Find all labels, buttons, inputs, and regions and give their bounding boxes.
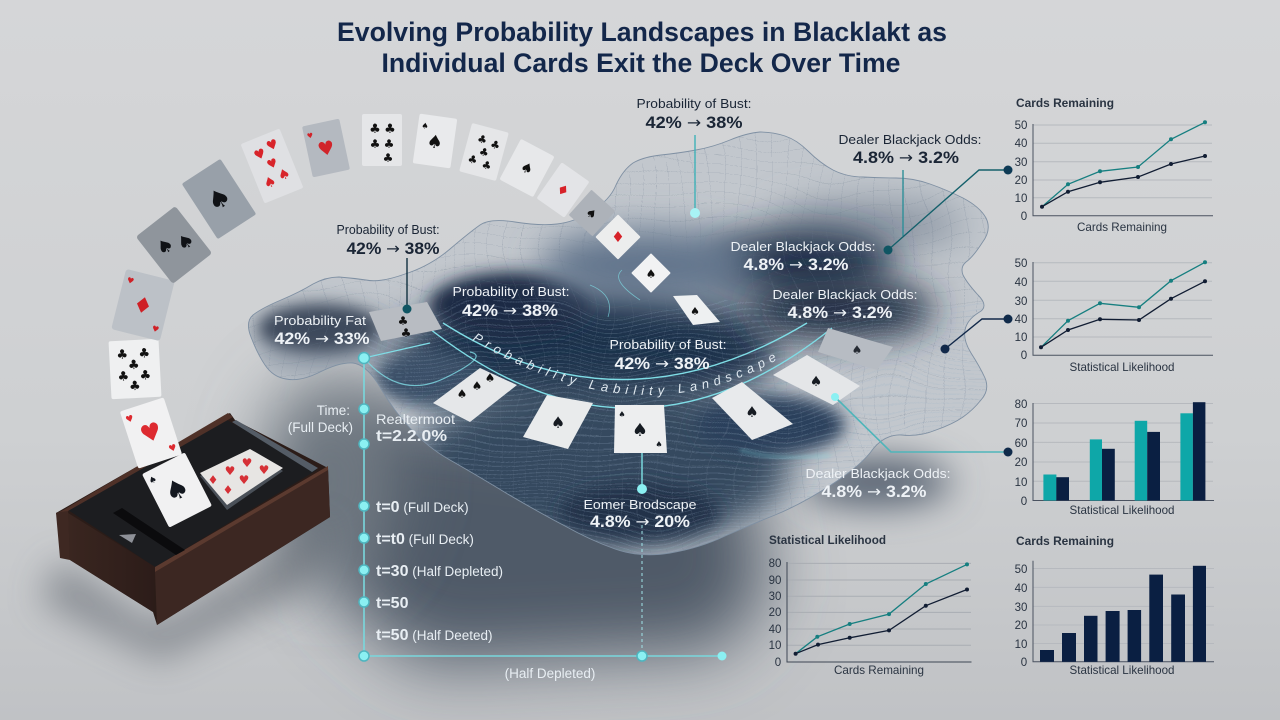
card: spade tilted: ♠: [551, 413, 565, 432]
chart: statistical likelihood line bottom: 10: [769, 640, 781, 652]
chart: cards remaining line 1: 40: [1015, 138, 1027, 150]
card: gray heart: [302, 119, 350, 177]
callout: eomer brodscape: 4.8% → 20%: [590, 512, 690, 531]
callout: probability fat: 42% → 33%: [274, 329, 370, 348]
arc text: Probability Lability Landscape: [472, 333, 776, 398]
card: spade front: ♠: [655, 440, 663, 449]
timeline labels: t=50 (Half Deeted): [376, 627, 493, 644]
card: spade far right: [773, 355, 860, 405]
chart: cards remaining line 1: 30: [1015, 157, 1027, 169]
card: spade far right: ♠: [810, 374, 822, 390]
card: deck of red cards: ♥: [225, 464, 235, 478]
surface cards: [369, 302, 893, 453]
card: spade in box: [142, 452, 212, 528]
callout: eomer brodscape: Eomer Brodscape: [584, 497, 696, 512]
card: ace of clubs: ♣: [139, 368, 152, 384]
card: ace of clubs: ♣: [128, 358, 140, 373]
chart: cards remaining line 1: 10: [1015, 193, 1027, 205]
callout connectors: [402, 135, 1012, 494]
card: seven of clubs tilted: [459, 123, 509, 181]
card: gray clubs: ♠: [172, 228, 199, 256]
card: small spade: ♠: [646, 267, 656, 281]
card: seven of clubs: ♣: [383, 151, 393, 165]
chart: cards remaining line 1: Cards Remaining: [1016, 96, 1114, 110]
callout: dealer mid: Dealer Blackjack Odds:: [772, 287, 918, 302]
chart: cards remaining line 1: 0: [1021, 211, 1027, 223]
chart: grouped bars: 80: [1015, 399, 1027, 411]
card: spades left: ♠: [485, 371, 495, 385]
timeline labels: t=0 (Full Deck): [376, 499, 469, 516]
card: spade: [499, 139, 555, 197]
callout: dealer lower: 4.8% → 3.2%: [822, 482, 926, 501]
callout: bust top: 42% → 38%: [646, 113, 742, 132]
card: gray spade: [182, 159, 256, 239]
card: flat clubs: ♣: [398, 314, 408, 328]
chart: statistical likelihood line 2: 40: [1015, 314, 1027, 326]
card: seven of clubs tilted: ♣: [466, 152, 479, 167]
timeline labels: [288, 403, 595, 681]
callout: bust left: Probability of Bust:: [336, 222, 440, 237]
card: seven of clubs tilted: ♣: [480, 158, 493, 173]
card: flat clubs: [369, 302, 442, 341]
callout: dealer lower: Dealer Blackjack Odds:: [806, 466, 950, 481]
card: seven of clubs tilted: ♣: [476, 132, 489, 147]
chart: statistical likelihood line bottom: Statistical Likelihood: [769, 533, 886, 547]
callout: probability fat: [274, 313, 370, 348]
card shower box: [40, 413, 330, 660]
card: flat spade: ♠: [690, 305, 700, 318]
card: ten of hearts: ♥: [264, 137, 281, 155]
timeline labels: Realtermoot: [376, 412, 455, 427]
card: deck of red cards: ♥: [239, 473, 249, 487]
callout: dealer mid: [772, 287, 918, 322]
card: spade: ♠: [517, 159, 536, 179]
chart: statistical likelihood line 2: 0: [1021, 350, 1027, 362]
title: Evolving Probability Landscapes in Blacklakt as: [337, 17, 947, 47]
timeline nodes: [358, 352, 726, 661]
card: falling ace of hearts: [120, 397, 182, 469]
card: spade front: ♠: [618, 410, 626, 419]
card: falling ace of hearts: ♥: [168, 443, 178, 455]
card: ten of hearts: ♠: [261, 173, 279, 193]
callout: bust left: 42% → 38%: [346, 239, 440, 258]
chart: cards remaining bars: 0: [1021, 657, 1027, 669]
chart: grouped bars: 0: [1021, 496, 1027, 508]
callout: bust centre: Probability of Bust:: [452, 284, 570, 299]
card: flat clubs: ♣: [401, 326, 411, 340]
card: ten of hearts: ♥: [252, 146, 268, 164]
chart: statistical likelihood line bottom: 80: [769, 558, 781, 570]
chart: cards remaining bars: [1015, 534, 1214, 677]
card: seven of clubs tilted: ♣: [477, 145, 490, 160]
card arc: [109, 114, 720, 399]
card: gray flat card: [818, 328, 893, 370]
timeline labels: t=30 (Half Depleted): [376, 563, 503, 580]
chart: cards remaining line 1: 50: [1015, 120, 1027, 132]
card: deck of red cards: ♥: [259, 463, 269, 477]
callout: bust lower: [610, 337, 726, 373]
chart: statistical likelihood line bottom: 20: [769, 607, 781, 619]
callout: probability fat: Probability Fat: [274, 313, 366, 328]
card: falling ace of hearts: ♥: [125, 414, 135, 426]
chart: cards remaining bars: 50: [1015, 564, 1027, 576]
timeline labels: t=2.2.0%: [376, 428, 447, 445]
card: seven of clubs: ♣: [384, 137, 394, 151]
card: seven of spades: ♠: [421, 121, 429, 131]
chart: grouped bars: Statistical Likelihood: [1070, 503, 1174, 517]
callout: dealer upper: [730, 239, 876, 274]
card: seven of clubs: [362, 114, 402, 166]
card: gray spade small: [569, 190, 615, 236]
card: red ace: ♦: [130, 292, 155, 321]
chart: cards remaining bars: Cards Remaining: [1016, 534, 1114, 548]
timeline labels: Time:: [317, 403, 350, 418]
callout: bust centre: 42% → 38%: [462, 301, 558, 320]
card: diamond: [536, 162, 590, 218]
chart: cards remaining bars: 30: [1015, 602, 1027, 614]
chart: statistical likelihood line 2: [1015, 258, 1213, 374]
card: deck of red cards: ♦: [223, 483, 233, 497]
card: seven of clubs: ♣: [370, 137, 380, 151]
chart: grouped bars: 60: [1015, 438, 1027, 450]
callout: dealer top: [838, 132, 982, 167]
callout: bust centre: [452, 284, 570, 320]
chart: statistical likelihood line bottom: 30: [769, 591, 781, 603]
callout: dealer mid: 4.8% → 3.2%: [788, 303, 892, 322]
chart: grouped bars: [1015, 399, 1214, 517]
card: gray flat card: ♠: [852, 343, 862, 357]
chart: statistical likelihood line 2: 40: [1015, 277, 1027, 289]
card: red ace: ♥: [151, 324, 160, 334]
card: seven of clubs: ♣: [384, 122, 396, 137]
card: seven of clubs tilted: ♣: [489, 138, 502, 153]
card: ten of hearts: [241, 128, 303, 204]
timeline: [358, 352, 726, 661]
card: falling ace of hearts: ♥: [136, 416, 166, 450]
chart: grouped bars: 70: [1015, 418, 1027, 430]
probability landscape surface: [248, 132, 989, 556]
timeline labels: t=50: [376, 595, 409, 612]
card: spades left: [433, 368, 517, 422]
chart: statistical likelihood line bottom: 40: [769, 624, 781, 636]
callout: dealer upper: 4.8% → 3.2%: [744, 255, 848, 274]
card: ace of clubs: ♣: [129, 379, 141, 394]
chart: cards remaining bars: Statistical Likelihood: [1070, 663, 1174, 677]
card: diamond: ♦: [553, 181, 572, 201]
chart: statistical likelihood line 2: 50: [1015, 258, 1027, 270]
chart: cards remaining line 1: 20: [1015, 175, 1027, 187]
callout: bust top: Probability of Bust:: [636, 96, 752, 111]
card: gray spade: ♠: [202, 181, 237, 219]
card: gray heart: ♥: [316, 136, 337, 162]
chart: statistical likelihood line 2: 30: [1015, 296, 1027, 308]
card: red diamond: [595, 214, 641, 260]
card: small spade: [631, 253, 671, 293]
card: gray clubs: [136, 206, 212, 284]
card: spades left: ♠: [472, 379, 482, 393]
callout: dealer lower: [806, 466, 950, 501]
chart: statistical likelihood line 2: Statistical Likelihood: [1070, 360, 1174, 374]
title: [337, 17, 947, 78]
callout: eomer brodscape: [584, 497, 696, 531]
card: seven of spades: ♠: [425, 131, 444, 154]
card: gray spade small: ♠: [583, 205, 600, 223]
card: ten of hearts: ♠: [275, 165, 293, 185]
card: ace of clubs: ♣: [116, 347, 128, 363]
callout: bust top: [636, 96, 752, 132]
chart: cards remaining line 1: Cards Remaining: [1077, 220, 1167, 234]
timeline labels: (Full Deck): [288, 420, 353, 435]
chart: statistical likelihood line bottom: Cards Remaining: [834, 663, 924, 677]
glowing wisps: [364, 270, 830, 458]
card: ace of clubs: [109, 339, 161, 399]
card: ace of clubs: ♣: [138, 346, 150, 362]
card: spade right: [712, 382, 793, 440]
chart: cards remaining line 1: [1015, 96, 1213, 234]
chart: cards remaining bars: 10: [1015, 639, 1027, 651]
chart: statistical likelihood line bottom: 0: [775, 657, 781, 669]
chart: cards remaining bars: 20: [1015, 620, 1027, 632]
chart: grouped bars: 10: [1015, 477, 1027, 489]
title: Individual Cards Exit the Deck Over Time: [382, 48, 900, 78]
card: red ace: [111, 269, 175, 341]
card: spade in box: ♠: [147, 474, 159, 487]
card: spade tilted: [523, 395, 593, 449]
card: spade right: ♠: [745, 403, 759, 421]
card: red ace: ♥: [126, 276, 135, 286]
callout: bust lower: Probability of Bust:: [610, 337, 726, 352]
callout: bust left: [336, 222, 440, 258]
card: deck of red cards: ♦: [208, 473, 218, 487]
card: seven of spades: [413, 114, 457, 168]
chart: statistical likelihood line bottom: [769, 533, 972, 677]
callout: bust lower: 42% → 38%: [614, 354, 710, 373]
chart: statistical likelihood line bottom: 90: [769, 575, 781, 587]
timeline labels: t=t0 (Full Deck): [376, 531, 474, 548]
timeline labels: (Half Depleted): [505, 666, 595, 681]
callout: dealer top: 4.8% → 3.2%: [853, 148, 959, 167]
callout: dealer upper: Dealer Blackjack Odds:: [730, 239, 876, 254]
card: gray clubs: ♠: [152, 233, 179, 261]
card: deck of red cards: [200, 449, 283, 510]
card: spade front: ♠: [632, 420, 648, 441]
card: spade front: [614, 405, 667, 453]
chart: statistical likelihood line 2: 10: [1015, 332, 1027, 344]
card: spades left: ♠: [457, 387, 467, 401]
card: deck of red cards: ♥: [242, 456, 252, 470]
chart: grouped bars: 20: [1015, 457, 1027, 469]
card: gray heart: ♥: [306, 131, 314, 141]
card: ace of clubs: ♣: [117, 369, 130, 385]
callout: dealer top: Dealer Blackjack Odds:: [838, 132, 982, 147]
chart: cards remaining bars: 40: [1015, 583, 1027, 595]
card: flat spade: [673, 295, 720, 325]
card: ten of hearts: ♥: [265, 155, 280, 172]
card: seven of clubs: ♣: [369, 122, 381, 137]
card: spade in box: ♠: [159, 471, 195, 510]
arcs with landscape label: [432, 322, 832, 408]
card: red diamond: ♦: [611, 228, 625, 246]
